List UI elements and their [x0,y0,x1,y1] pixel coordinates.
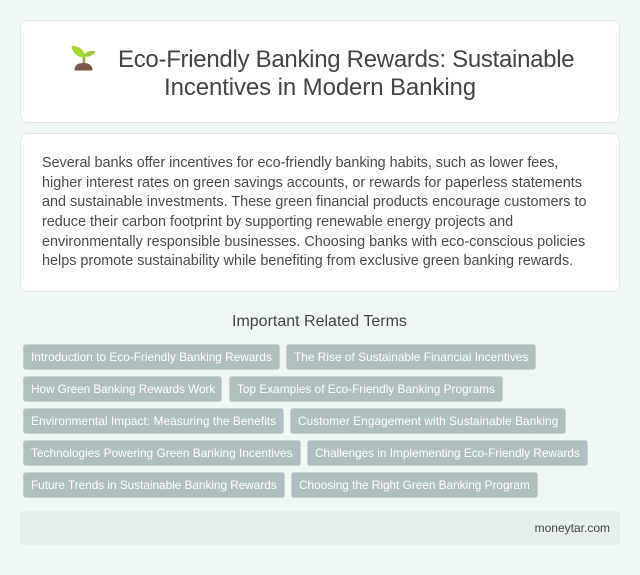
tag [23,376,222,402]
tag [23,408,284,434]
heading: related terms: Important Related Terms [232,313,407,330]
text block: description: Several banks offer incentives for eco-friendly banking habits, such as lower fees, [42,155,558,171]
tag: Environmental Impact: Measuring the Benefits [31,414,276,428]
tag: Introduction to Eco-Friendly Banking Rewards [31,350,272,364]
title: Eco-Friendly Banking Rewards: Sustainable [118,46,574,73]
tag: Customer Engagement with Sustainable Banking [298,414,558,428]
tag [23,344,280,370]
panel: title card [20,20,620,123]
tag [307,440,588,466]
text block: description: higher interest rates on green savings accounts, or rewards for paperless statements [42,175,582,191]
tag [23,440,301,466]
tag: Choosing the Right Green Banking Program [299,478,530,492]
tag: The Rise of Sustainable Financial Incentives [294,350,528,364]
title: Incentives in Modern Banking [164,74,476,101]
tag: Future Trends in Sustainable Banking Rewards [31,478,277,492]
text block: description: environmentally responsible businesses. Choosing banks with eco-conscious policies [42,234,585,250]
tag: How Green Banking Rewards Work [31,382,215,396]
tag [290,408,566,434]
icon: sprout [72,46,96,70]
text block: description [42,155,586,269]
title [118,46,574,101]
tag [291,472,538,498]
tag: Challenges in Implementing Eco-Friendly Rewards [315,446,580,460]
tag [286,344,536,370]
tag: Technologies Powering Green Banking Incentives [31,446,293,460]
panel: tags [23,344,588,498]
text block: description: helps promote sustainability while benefiting from exclusive green banking rewards. [42,253,573,269]
footer text: source: moneytar.com [535,521,610,535]
text block: description: and sustainable investments. These green financial products encourage customers to [42,194,586,210]
text block: description: reduce their carbon footprint by supporting renewable energy projects and [42,214,513,230]
tag [229,376,503,402]
tag: Top Examples of Eco-Friendly Banking Programs [237,382,495,396]
tag [23,472,285,498]
footer [20,511,620,545]
panel: description [20,133,620,292]
